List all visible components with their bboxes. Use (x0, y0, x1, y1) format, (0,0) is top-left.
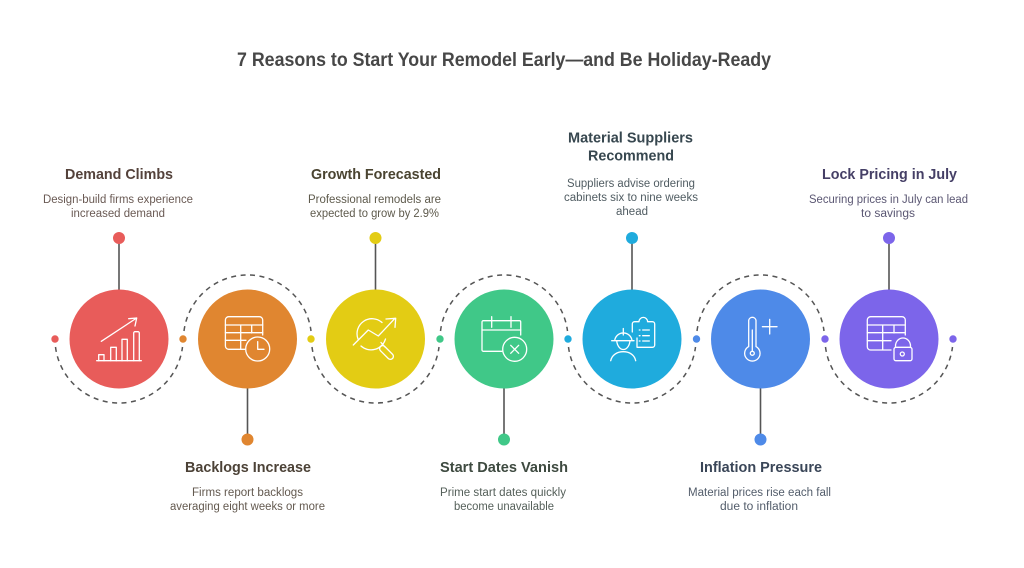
step 4: Start Dates Vanish (440, 290, 568, 513)
description: due to inflation (720, 501, 798, 513)
end marker dot (949, 335, 957, 343)
description: averaging eight weeks or more (170, 501, 325, 513)
dashed connector path (56, 275, 952, 403)
icon: table with clock (225, 317, 270, 361)
title: 7 Reasons to Start Your Remodel Early—and Be Holiday-Ready (237, 50, 771, 71)
connector dot (179, 335, 187, 343)
description: become unavailable (454, 501, 554, 513)
connector dot (564, 335, 572, 343)
heading: Start Dates Vanish (440, 459, 568, 476)
step 2: Backlogs Increase (170, 290, 325, 513)
description: to savings (861, 208, 915, 220)
description: ahead (616, 206, 648, 218)
description: Material prices rise each fall (688, 487, 831, 499)
step 3: Growth Forecasted (308, 166, 441, 388)
description: Suppliers advise ordering (567, 178, 695, 190)
description: cabinets six to nine weeks (564, 192, 698, 204)
description: increased demand (71, 208, 165, 220)
start marker dot (51, 335, 59, 343)
description: Securing prices in July can lead (809, 194, 968, 206)
description: Firms report backlogs (192, 487, 303, 499)
connector dot (821, 335, 829, 343)
step 5: Material Suppliers Recommend (564, 130, 698, 388)
step 6: Inflation Pressure (688, 290, 831, 513)
heading: Recommend (588, 148, 674, 165)
description: expected to grow by 2.9% (310, 208, 439, 220)
connector dot (693, 335, 700, 343)
description: Professional remodels are (308, 194, 441, 206)
heading: Material Suppliers (568, 130, 693, 146)
connector dot (436, 335, 444, 343)
step 1: Demand Climbs (43, 166, 193, 388)
icon: thermometer with plus (745, 317, 777, 361)
icon: rising bar chart (97, 318, 141, 361)
icon: magnifier with growth arrow (353, 318, 396, 361)
heading: Demand Climbs (65, 166, 173, 183)
description: Design-build firms experience (43, 194, 193, 206)
heading: Backlogs Increase (185, 459, 311, 476)
description: Prime start dates quickly (440, 487, 566, 499)
connector dot (307, 335, 315, 343)
step 7: Lock Pricing in July (809, 166, 968, 388)
icon: table with padlock (867, 317, 912, 361)
icon: calendar with cross (482, 317, 527, 361)
heading: Inflation Pressure (700, 459, 822, 476)
heading: Lock Pricing in July (822, 166, 958, 183)
icon: worker with clipboard (611, 317, 655, 361)
heading: Growth Forecasted (311, 166, 441, 183)
